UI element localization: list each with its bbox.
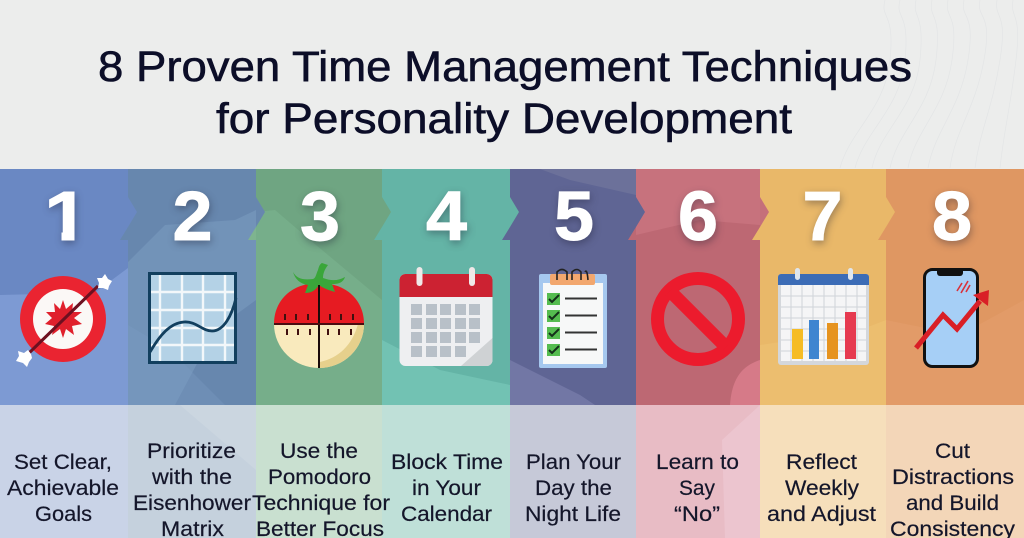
caption 5: Day the	[535, 476, 612, 500]
caption 2	[133, 439, 251, 538]
caption 7	[767, 450, 876, 526]
icon: target with arrow	[16, 274, 112, 367]
column 6	[656, 177, 739, 526]
column 7	[767, 177, 876, 526]
caption 1: Set Clear,	[14, 450, 112, 474]
caption 3: Pomodoro	[268, 465, 371, 489]
caption 6: Learn to	[656, 450, 739, 474]
caption 2: Prioritize	[147, 439, 236, 463]
number 1: 1	[44, 177, 90, 255]
caption 4: in Your	[412, 476, 481, 500]
column 1	[7, 177, 119, 526]
column 4	[391, 177, 503, 526]
title	[98, 44, 912, 143]
caption 5: Plan Your	[526, 450, 621, 474]
caption 8: and Build	[906, 491, 999, 515]
icon: checklist clipboard	[539, 270, 607, 368]
caption 1	[7, 450, 119, 526]
number 6: 6	[678, 177, 718, 255]
number 4: 4	[426, 177, 467, 255]
caption 6: “No”	[674, 502, 720, 526]
caption 3: Use the	[280, 439, 358, 463]
caption 2: with the	[151, 465, 232, 489]
column 2	[133, 177, 251, 538]
caption 8	[890, 439, 1015, 538]
caption 3: Technique for	[252, 491, 390, 515]
title: 8 Proven Time Management Techniques	[98, 44, 912, 91]
panel: coloured column backgrounds	[0, 169, 1024, 405]
number 7: 7	[802, 177, 842, 255]
caption 6	[656, 450, 739, 526]
icon: calendar with bar chart	[778, 268, 869, 365]
icon: eisenhower matrix chart	[150, 274, 236, 362]
caption 4: Calendar	[401, 502, 492, 526]
caption 4: Block Time	[391, 450, 503, 474]
column 8	[890, 177, 1015, 538]
icon: pomodoro tomato timer	[274, 263, 364, 368]
number 3: 3	[300, 177, 340, 255]
icon: calendar	[400, 267, 492, 366]
number 2: 2	[172, 177, 212, 255]
icon: phone with rising arrow	[916, 269, 989, 366]
caption 5	[525, 450, 621, 526]
caption 2: Eisenhower	[133, 491, 251, 515]
column 3	[252, 177, 390, 538]
column 5	[525, 177, 621, 526]
number 5: 5	[554, 177, 594, 255]
caption 7: Reflect	[786, 450, 857, 474]
panel: caption backgrounds	[0, 405, 1024, 538]
icon: prohibition sign	[658, 278, 738, 360]
caption 4	[391, 450, 503, 526]
arrow notches between columns	[120, 197, 895, 240]
caption 7: and Adjust	[767, 502, 876, 526]
title: for Personality Development	[216, 96, 792, 143]
caption 5: Night Life	[525, 502, 621, 526]
caption 8: Distractions	[892, 465, 1014, 489]
caption 8: Cut	[935, 439, 970, 463]
caption 1: Achievable	[7, 476, 119, 500]
caption 1: Goals	[35, 502, 92, 526]
caption 3	[252, 439, 390, 538]
caption 6: Say	[679, 476, 715, 500]
caption 7: Weekly	[785, 476, 859, 500]
number 8: 8	[932, 177, 972, 255]
